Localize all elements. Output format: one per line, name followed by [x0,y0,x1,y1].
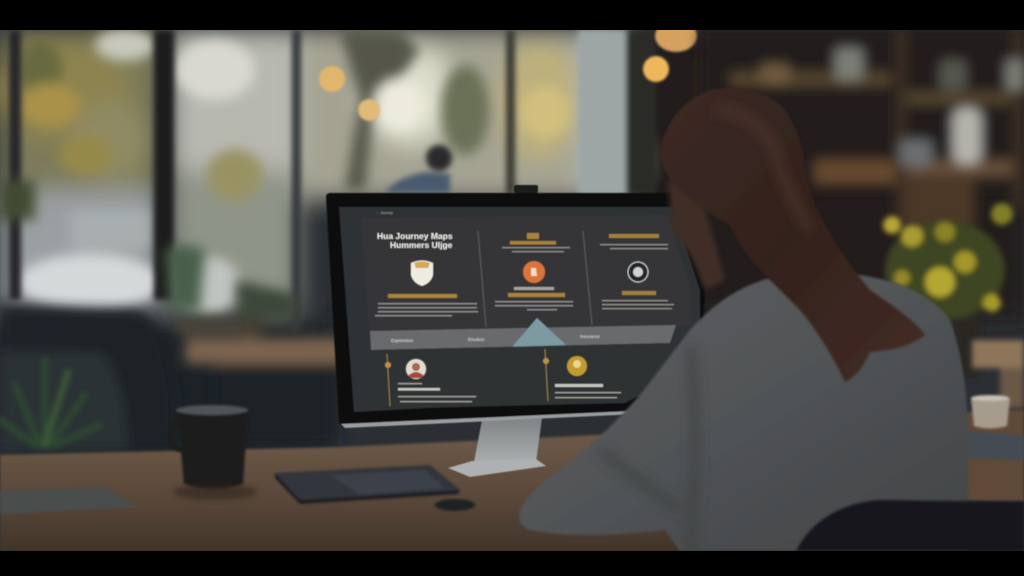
right desk [965,410,1024,501]
screen [339,207,700,412]
heading: right panel [609,234,659,238]
sweater fold [600,345,695,551]
right cup [971,395,1010,428]
monitor [326,185,705,428]
lower right text [555,384,621,398]
distant person [385,145,452,193]
potted plant lower left [0,360,100,445]
coffee mug [170,405,248,489]
heading: middle panel [510,233,556,244]
foreground chair [796,500,1024,551]
mug shadow [173,484,257,500]
heading: left panel: Hummers Uljge [390,240,453,250]
hair highlight [715,110,810,230]
timeline left [385,354,391,406]
tablet on desk [275,465,460,504]
far right table [972,340,1024,408]
left chairs and tables [0,180,345,450]
bokeh lights [319,20,697,121]
heading: left panel [377,231,453,250]
bottom silver edge [340,410,628,429]
main panel [536,284,537,285]
webcam [514,185,538,193]
middle text [502,247,570,252]
bezel [326,193,705,427]
lower left text [398,383,476,402]
body text left [375,303,478,316]
band labels: Insurance [580,334,600,339]
monitor stand [448,418,546,477]
icon: orange circle [523,261,545,283]
shelves [700,30,1024,230]
middle body [495,301,573,310]
sweater [519,275,968,551]
timeline right [543,349,549,401]
lower panel [372,343,670,409]
icon detail [414,262,430,268]
avatar [406,359,426,379]
band labels [391,334,600,343]
band [370,325,676,350]
small device [435,499,475,511]
band labels: Expression [391,338,414,343]
header text: ◾ Journey [375,211,393,215]
notebook lower left [0,487,138,514]
icon: shield [411,260,433,286]
yellow plant right [883,203,1013,378]
heading: left panel: Hua Journey Maps [377,231,453,241]
gold icon [567,356,587,376]
hair [660,88,925,382]
street cars [18,29,658,313]
right device [965,430,1024,460]
right body [602,300,674,309]
triangle [512,318,566,347]
window mullions [9,30,656,330]
icon: ring [628,262,648,282]
face edge [668,180,725,290]
band labels: Emotion [468,337,485,342]
subheading left [388,294,457,298]
right text [600,244,668,249]
icon glyph [531,268,537,276]
person [519,88,968,551]
panel dividers [478,231,592,327]
middle sub heading [508,287,565,297]
desk [0,430,700,551]
right sub heading [622,291,656,295]
